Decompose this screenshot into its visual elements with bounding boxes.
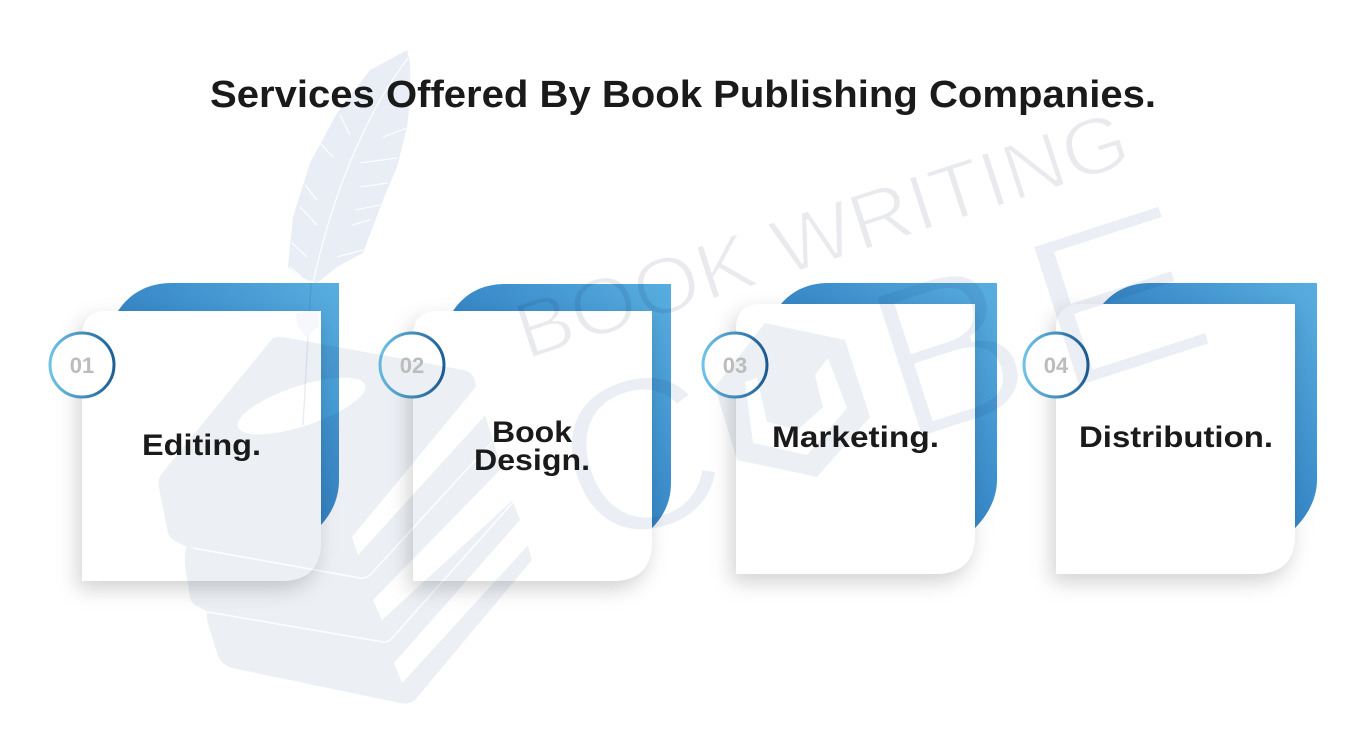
card 2 white face [413,311,652,581]
icon: feather watermark [288,50,410,425]
card 3 number ring [703,333,767,397]
number 04: 04 [1044,353,1069,378]
icon: book stack watermark [158,337,532,704]
card 4 number ring [1024,333,1088,397]
label: Book Design: Design. [474,444,590,477]
number 03: 03 [723,353,747,378]
watermark: brand name CUBE letters: B [842,210,1057,490]
watermark: brand name CUBE letters [572,207,1208,530]
card 4 white face [1056,304,1295,574]
panel: card 3 Marketing [703,283,997,574]
label: Editing: Editing. [142,429,261,462]
card 2 number ring [380,333,444,397]
label: Distribution: Distribution. [1079,421,1273,454]
panel: card 1 Editing [50,283,339,581]
number 01: 01 [70,353,94,378]
label: Book Design: Book [492,416,572,449]
watermark: brand name BOOK WRITING: BOOK WRITING [504,94,1140,376]
watermark: brand name CUBE letters: E [995,153,1238,441]
card 2 blue backing [453,284,671,528]
number 02: 02 [400,353,424,378]
card 1 blue backing [118,283,339,525]
panel: card 2 Book Design [380,284,671,581]
title: Services Offered By Book Publishing Companies. [210,74,1156,116]
label: Marketing: Marketing. [772,421,939,454]
card 4 blue backing [1103,283,1317,528]
card 1 white face [82,311,321,581]
card 3 white face [736,304,975,574]
card 1 number ring [50,333,114,397]
watermark: brand name CUBE letters: C [526,314,753,597]
icon: cube hexagon watermark [715,323,870,477]
card 3 blue backing [781,283,997,528]
panel: card 4 Distribution [1024,283,1317,574]
label: Book Design [474,416,590,477]
